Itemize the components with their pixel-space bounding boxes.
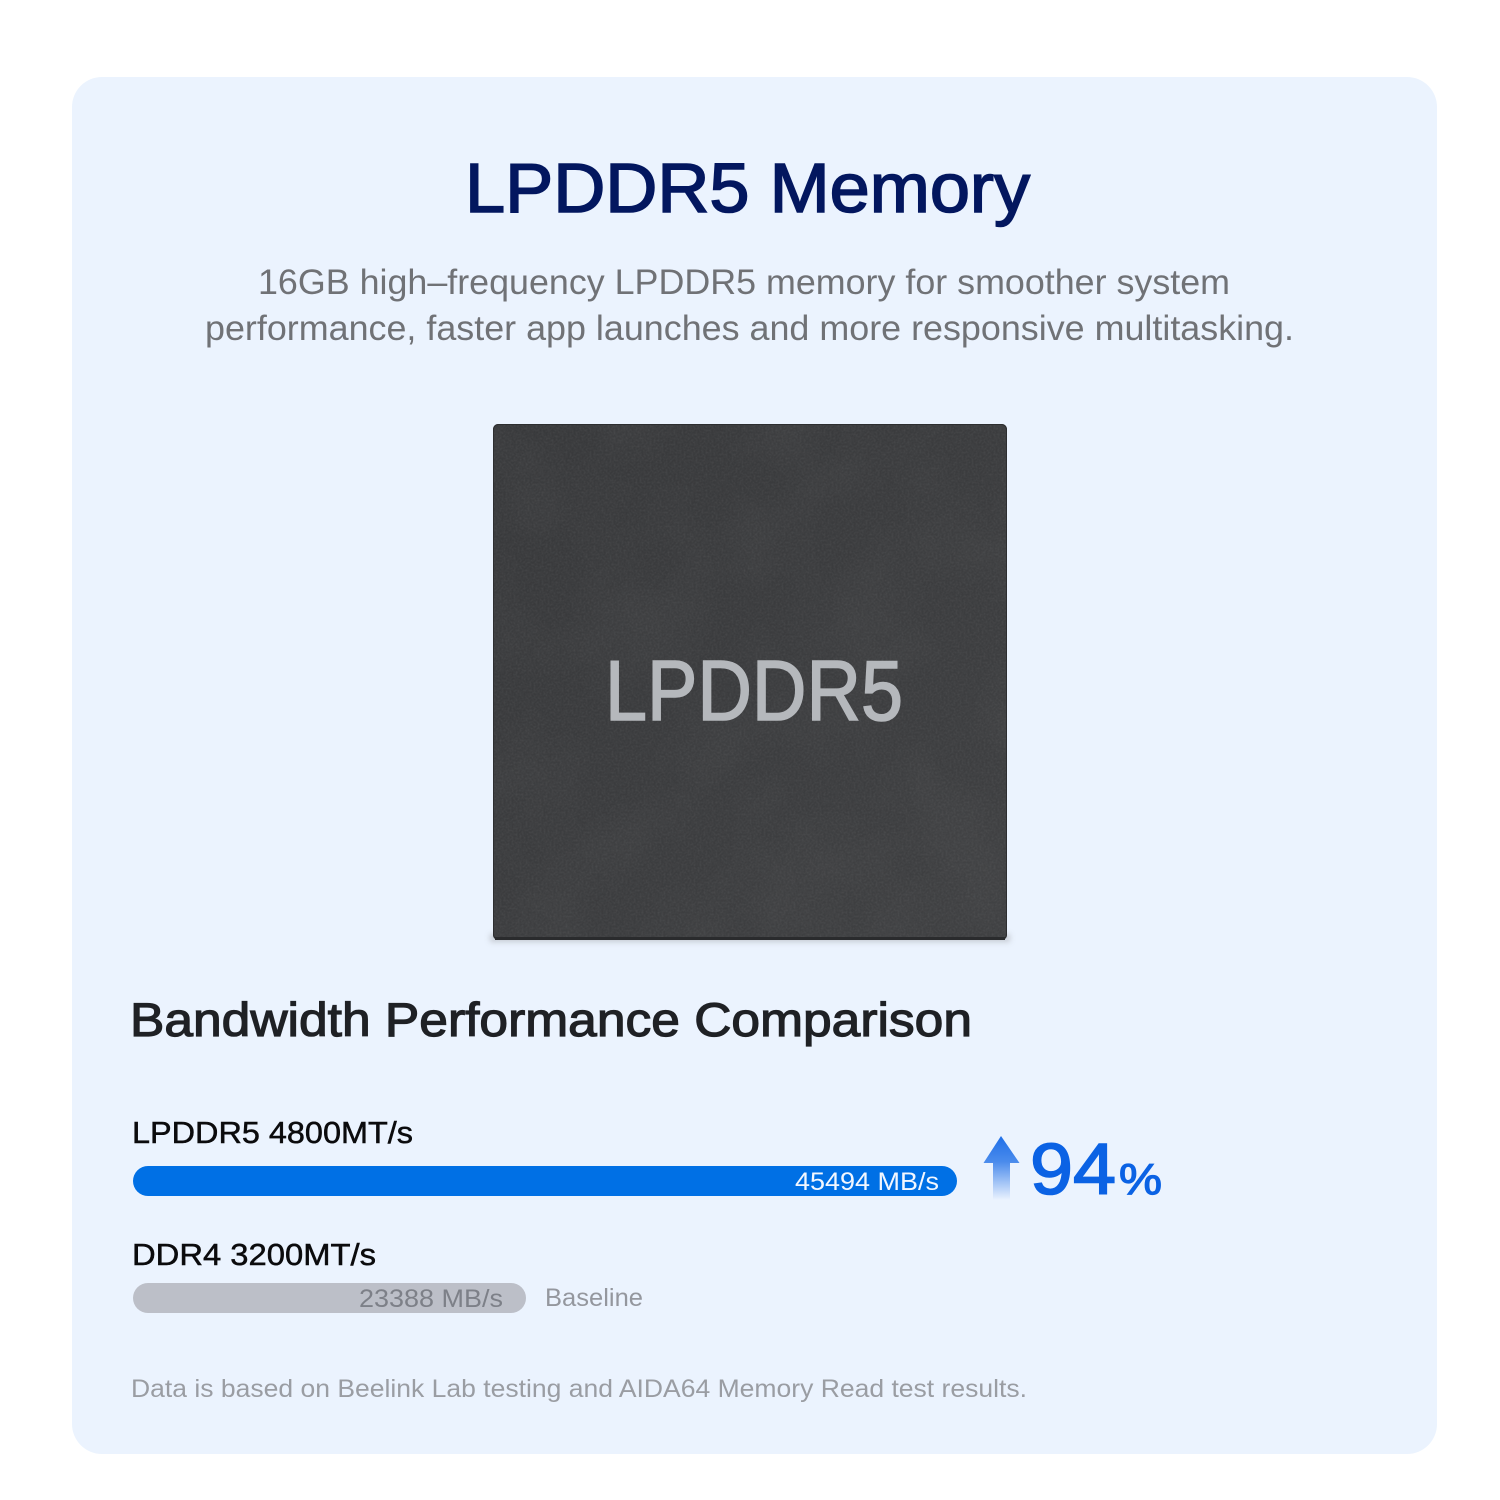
chip label: LPDDR5: [605, 644, 903, 739]
subtitle: [205, 263, 1294, 348]
bar: LPDDR5: [133, 1166, 957, 1196]
bar: DDR4: 23388 MB/s: [359, 1285, 503, 1313]
icon: up arrow: [984, 1136, 1020, 1200]
bar: LPDDR5: 45494 MB/s: [795, 1168, 939, 1196]
callout: 94%: %: [1119, 1155, 1162, 1204]
bar chart: [132, 1115, 1162, 1313]
section heading: Bandwidth Performance Comparison: [130, 993, 972, 1046]
footnote: Data is based on Beelink Lab testing and AIDA64 Memory Read test results.: [131, 1375, 1027, 1403]
label: LPDDR5: LPDDR5 4800MT/s: [132, 1115, 413, 1150]
title: LPDDR5 Memory: [465, 149, 1030, 227]
subtitle: 16GB high–frequency LPDDR5 memory for smoother system: [258, 263, 1230, 302]
callout: 94%: [1030, 1130, 1162, 1210]
callout: 94%: 94: [1030, 1130, 1116, 1210]
label: DDR4: DDR4 3200MT/s: [132, 1237, 376, 1272]
bar: DDR4: [133, 1283, 526, 1313]
chip image: [490, 424, 1010, 942]
baseline label: Baseline: [545, 1284, 643, 1312]
subtitle: performance, faster app launches and more responsive multitasking.: [205, 309, 1294, 348]
